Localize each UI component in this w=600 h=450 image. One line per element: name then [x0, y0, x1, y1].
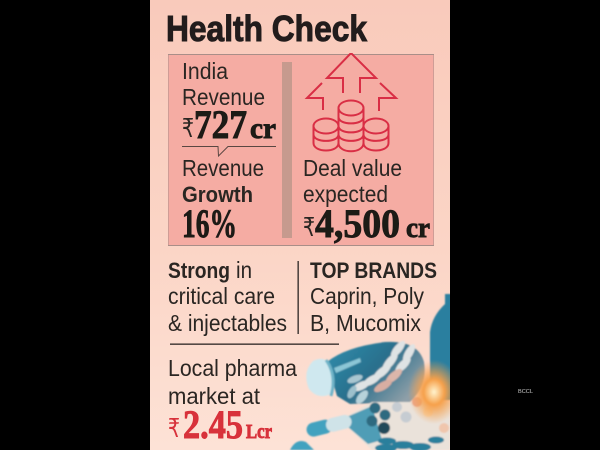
section rule	[170, 344, 339, 345]
title: Health Check	[166, 8, 368, 49]
background panel	[150, 0, 450, 450]
tipped bottle body	[327, 342, 425, 404]
blister pack	[340, 402, 450, 450]
figure: 4,500 crore: 4,500	[315, 201, 400, 246]
text: Deal value expected: expected	[303, 181, 388, 207]
cap rim	[326, 360, 333, 396]
text: top brands: TOP BRANDS	[310, 258, 437, 283]
figure: 2.45 lakh crore: ₹	[168, 413, 180, 443]
orange glow overlay	[409, 360, 450, 423]
illustration: medicine bottles and pills	[290, 294, 460, 450]
spilled white tablets	[345, 339, 417, 406]
center arrow	[327, 53, 376, 93]
text: Deal value expected	[303, 155, 402, 207]
figure: 727 crore	[182, 102, 276, 147]
left arrow	[307, 83, 323, 110]
text: India Revenue: Revenue	[182, 84, 265, 110]
right arrow	[379, 83, 396, 111]
dark round pills	[366, 402, 390, 434]
icon: rising arrows over coin stacks	[307, 53, 396, 151]
text: India Revenue	[182, 58, 265, 110]
center coin stack	[338, 100, 364, 151]
speech-notch rule	[182, 146, 276, 156]
row of teal capsules	[375, 436, 444, 450]
credit: BCCL	[518, 389, 533, 395]
figure: 727 crore: cr	[250, 112, 276, 145]
text: Revenue Growth	[182, 155, 264, 207]
text: India Revenue: India	[182, 58, 228, 84]
text: top brands: B, Mucomix	[310, 310, 421, 336]
text: Revenue Growth: Revenue	[182, 155, 264, 181]
bottle cap	[306, 359, 334, 396]
figure: 4,500 crore: ₹	[303, 212, 315, 242]
text: top brands	[310, 258, 437, 336]
figure: 2.45 lakh crore	[168, 402, 272, 447]
right coin stack	[364, 118, 388, 150]
text: critical care strength	[168, 257, 287, 336]
figure: 2.45 lakh crore: 2.45	[183, 402, 243, 447]
figure: 2.45 lakh crore: Lcr	[246, 421, 272, 443]
text: local pharma market: market at	[168, 383, 261, 409]
figure: 16 percent: 16%	[182, 201, 237, 246]
figure: 727 crore: 727	[194, 102, 247, 147]
text: critical care strength: in	[236, 257, 252, 283]
back bottle	[430, 294, 452, 400]
vertical divider band	[282, 62, 292, 238]
text: local pharma market	[168, 355, 297, 409]
bottle highlight	[334, 358, 361, 373]
capsule	[305, 413, 353, 438]
figure: 4,500 crore: cr	[406, 213, 430, 244]
text: local pharma market: Local pharma	[168, 355, 297, 381]
text: Deal value expected: Deal value	[303, 155, 402, 181]
column divider	[298, 261, 299, 334]
text: critical care strength: & injectables	[168, 310, 287, 336]
panel: key figures	[168, 53, 434, 246]
text: top brands: Caprin, Poly	[310, 283, 424, 309]
text: critical care strength: critical care	[168, 283, 275, 309]
left coin stack	[314, 118, 338, 150]
text: critical care strength: Strong	[168, 258, 230, 283]
capsule bottom left	[290, 441, 314, 450]
figure: 727 crore: ₹	[182, 113, 194, 143]
text: Revenue Growth: Growth	[182, 182, 253, 207]
pale round pills	[392, 397, 449, 433]
